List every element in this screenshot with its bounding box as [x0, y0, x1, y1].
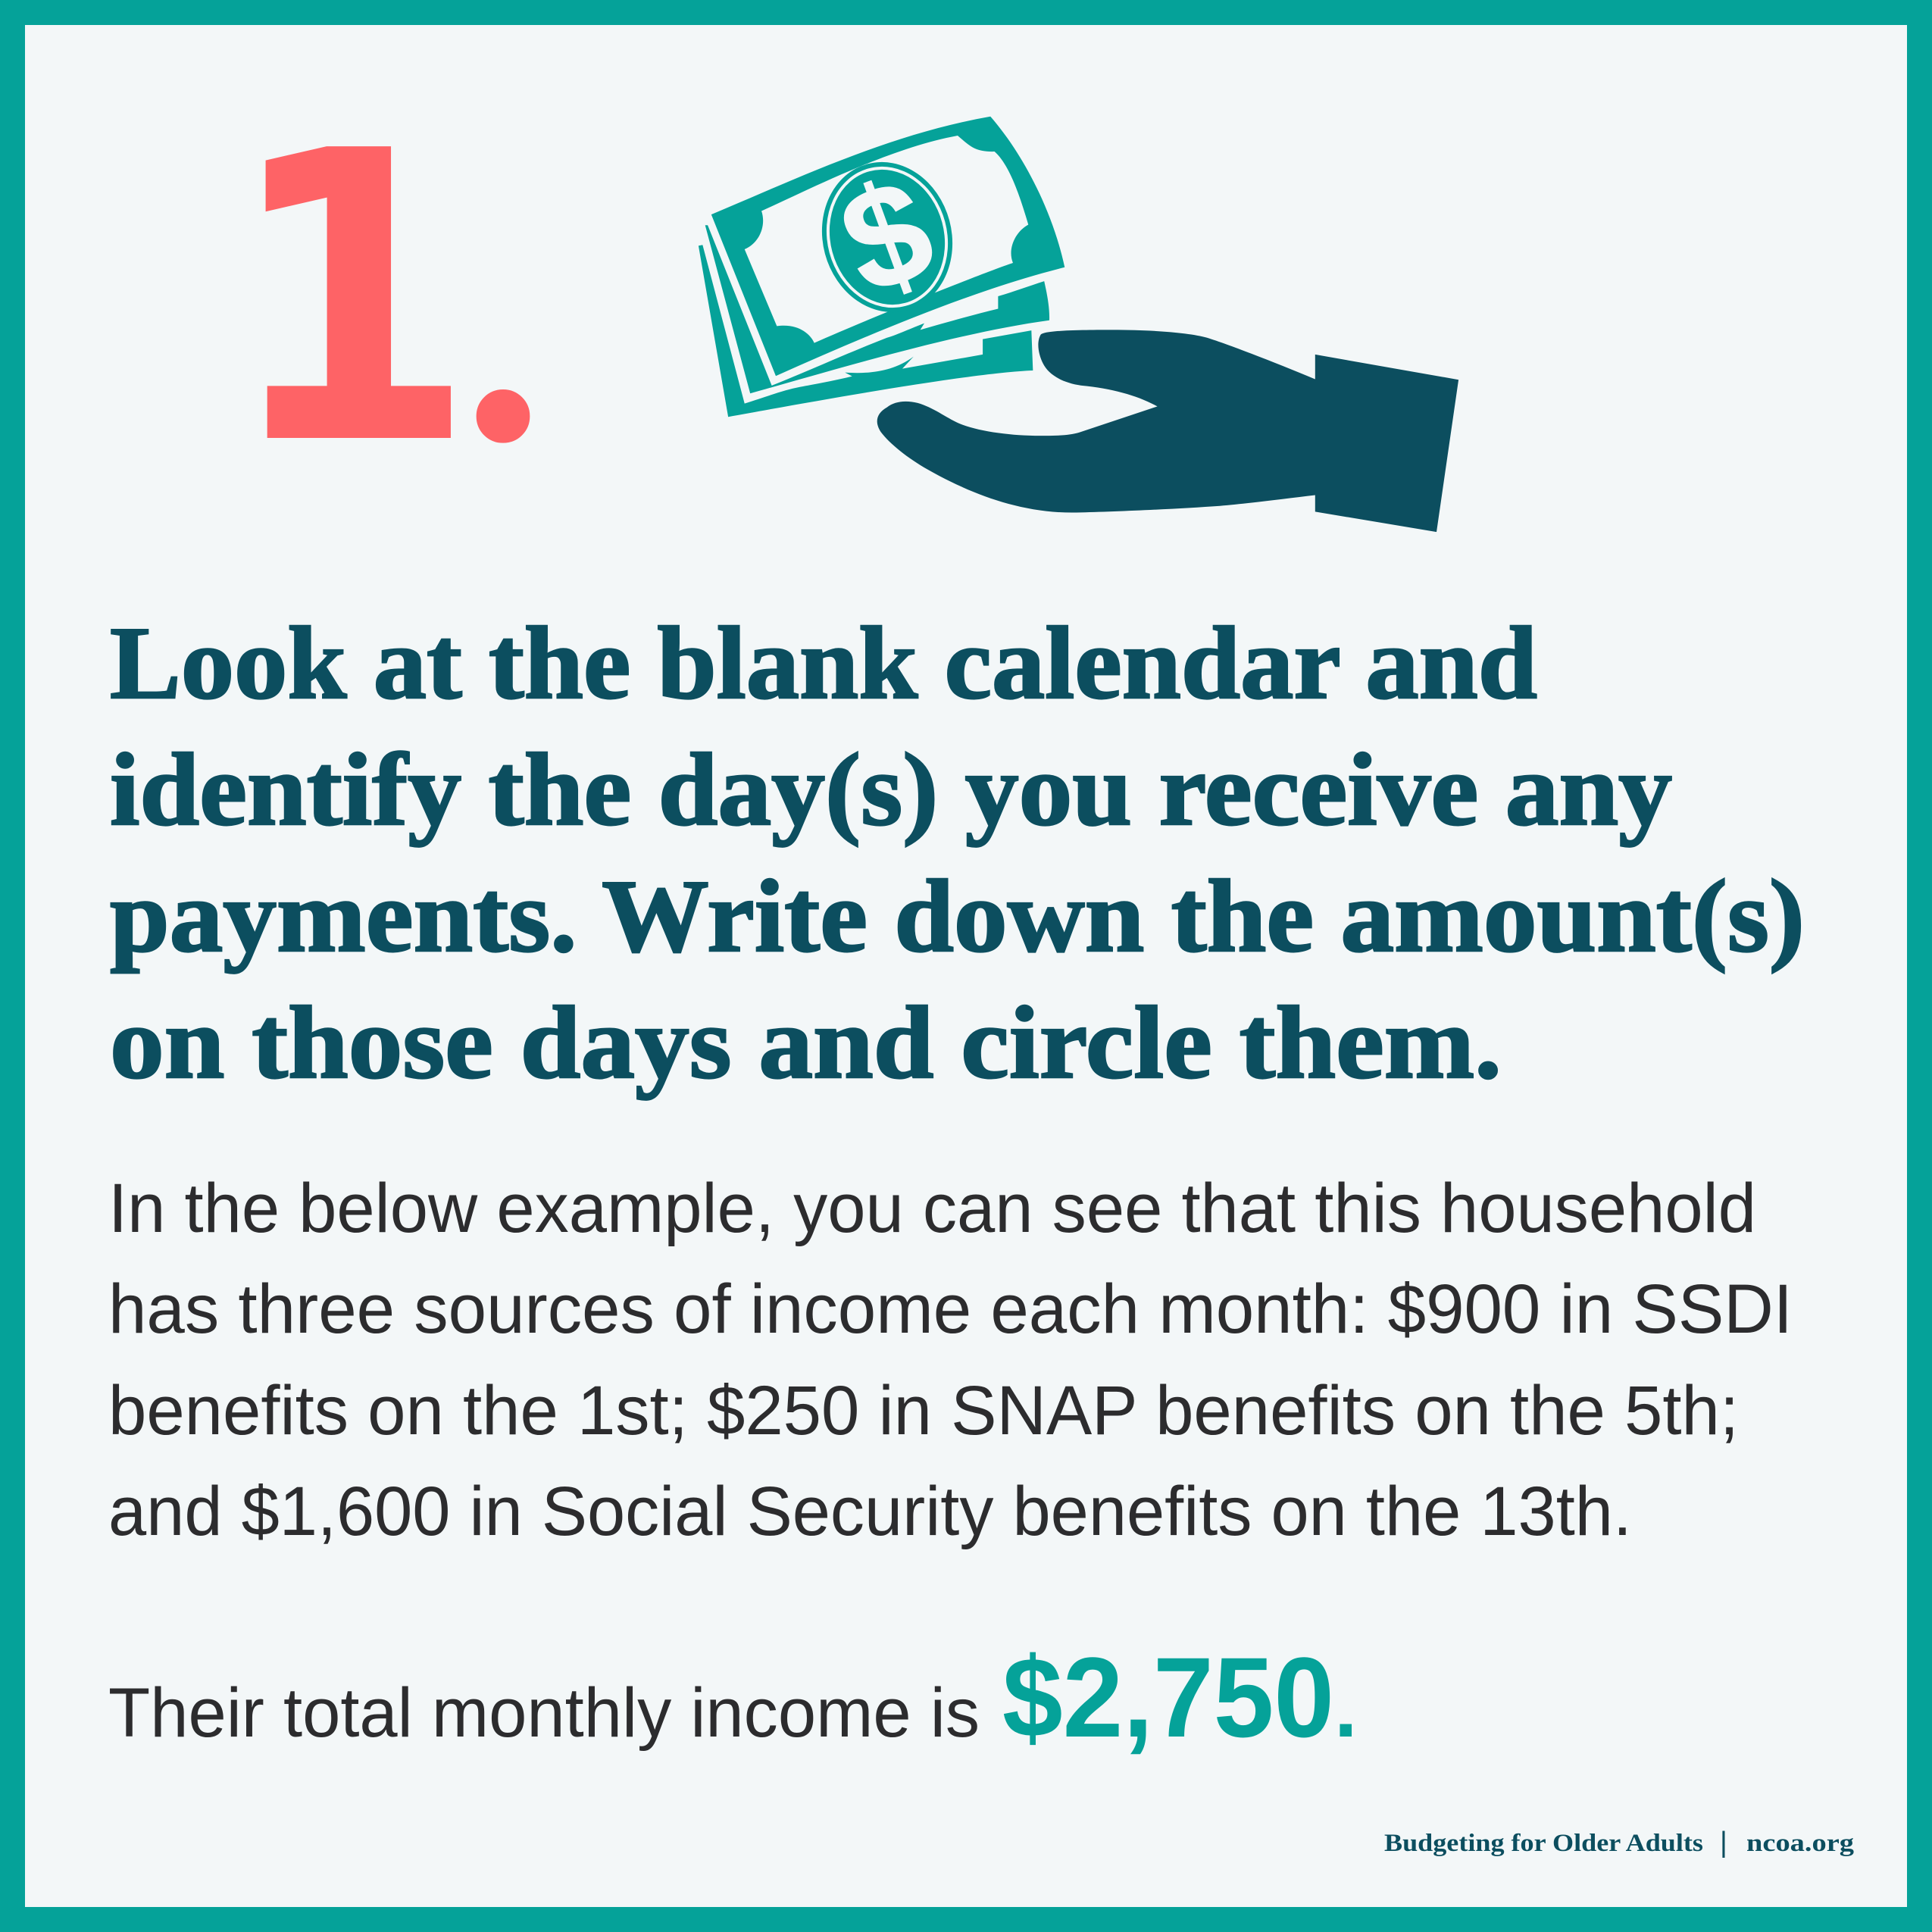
total income — [108, 1633, 1358, 1761]
body text: and $1,600 in Social Security benefits on the 13th. — [108, 1473, 1632, 1550]
footer: Budgeting for Older Adults — [1384, 1830, 1703, 1857]
total amount: $2,750 — [1002, 1633, 1334, 1761]
heading — [110, 605, 1805, 1100]
body text: benefits on the 1st; $250 in SNAP benefits on the 5th; — [108, 1372, 1739, 1449]
footer: ncoa.org — [1746, 1830, 1855, 1857]
body text — [108, 1170, 1793, 1550]
icon: bills — [699, 117, 1064, 417]
total amount: . — [1334, 1662, 1358, 1755]
icon: hand — [877, 330, 1458, 532]
body text: has three sources of income each month: $900 in SSDI — [108, 1271, 1793, 1348]
total income: Their total monthly income is — [108, 1674, 980, 1752]
icon: money in hand — [699, 117, 1458, 532]
footer — [1384, 1827, 1855, 1859]
footer: | — [1720, 1827, 1727, 1859]
heading: Look at the blank calendar and — [110, 605, 1537, 721]
heading: on those days and circle them. — [110, 985, 1502, 1100]
icon: dollar medallion: $ — [822, 147, 952, 326]
step number: 1 — [225, 67, 476, 533]
step number: . — [462, 144, 544, 511]
heading: payments. Write down the amount(s) — [110, 858, 1805, 974]
heading: identify the day(s) you receive any — [110, 732, 1672, 847]
body text: In the below example, you can see that this household — [108, 1170, 1756, 1247]
